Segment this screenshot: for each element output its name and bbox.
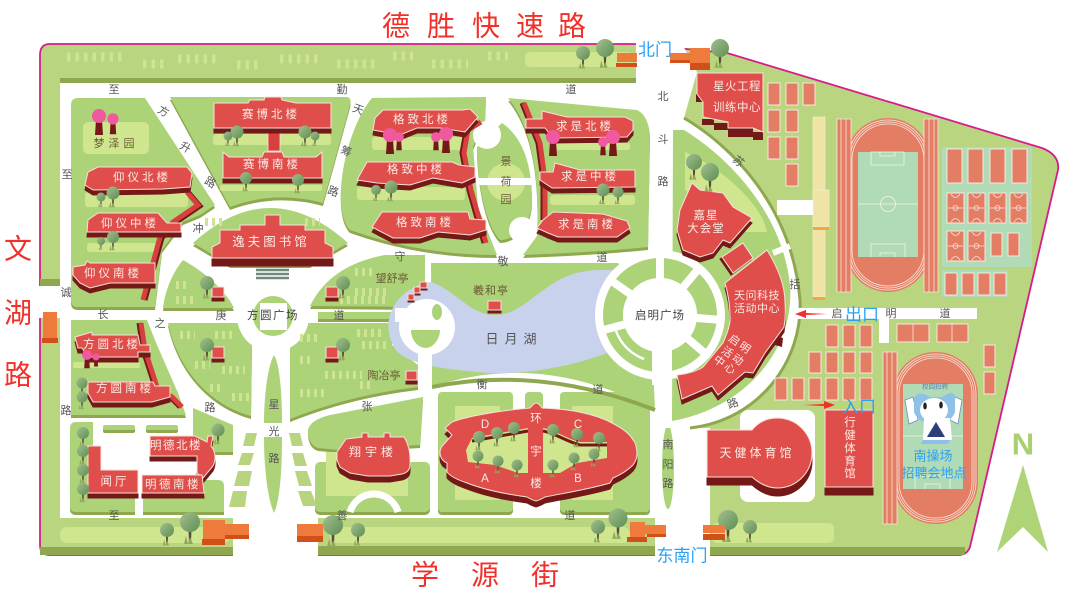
building: Tianjian gymnasium: 天健体育馆 — [719, 445, 795, 460]
road labels: 善 — [336, 508, 348, 522]
Nanyang road lens — [662, 425, 674, 509]
title: south road: 街 — [531, 560, 559, 590]
Fangyuan square: 方圆广场 — [247, 308, 299, 322]
building: Xinghuo training center: 星火工程 — [713, 80, 761, 93]
road labels: 道 — [566, 82, 576, 96]
road labels: 冲 — [192, 221, 204, 235]
building: Wenting hall: 闻厅 — [100, 474, 130, 488]
building: Xiangyu: 翔宇楼 — [349, 444, 397, 459]
title: south road — [411, 560, 559, 590]
Jinghe garden details: 园 — [500, 193, 512, 206]
title: north road: 快 — [472, 10, 500, 42]
title: west road: 文 — [4, 234, 32, 264]
building: Yangyi south — [73, 261, 155, 288]
corridors connecting buildings — [139, 103, 545, 407]
building: Xingjian gymnasium — [825, 410, 873, 487]
title: north road: 路 — [558, 10, 586, 42]
building: Xingjian gymnasium: 健 — [844, 429, 856, 442]
building: Yangyi middle — [87, 213, 181, 232]
building: Fangyuan north: 方圆北楼 — [83, 337, 141, 351]
road labels: 道 — [940, 306, 950, 320]
label: job fair location: 南操场 — [913, 448, 953, 464]
building: Huanyu A B C D ring: 环 — [530, 413, 542, 425]
road labels: 路 — [658, 175, 668, 188]
road labels: 升 — [177, 139, 193, 156]
building: Tianwen and Qiming activity center: 活动中心 — [734, 302, 780, 315]
decorative turf marks — [73, 122, 635, 512]
building: Jiaxing hall — [677, 183, 752, 257]
lake: Riyue Lake — [388, 270, 640, 373]
Qiming square — [595, 250, 725, 428]
south strips — [40, 523, 965, 555]
building: Mingde south: 明德南楼 — [145, 477, 201, 491]
road labels: 至 — [108, 84, 120, 96]
soccer field — [903, 384, 963, 489]
building: Qiushi middle — [540, 163, 635, 188]
road labels: 光 — [268, 424, 280, 438]
road labels: 道 — [592, 382, 604, 396]
Fangyuan square — [237, 280, 309, 352]
gym plot — [740, 410, 815, 502]
title: south road: 学 — [411, 560, 439, 590]
label: job fair location — [901, 448, 967, 480]
road labels: 筹 — [339, 143, 354, 160]
road labels: 路 — [202, 174, 218, 191]
building: Saibo north: 赛博北楼 — [242, 107, 300, 121]
soccer field — [858, 152, 918, 257]
south athletic track — [883, 352, 978, 524]
arrow: exit — [795, 310, 827, 318]
court zone — [942, 147, 1032, 297]
courtyard inner shadow — [472, 431, 607, 445]
road labels: 张 — [362, 400, 372, 413]
gate label: north gate: 北门 — [638, 40, 672, 60]
building: Gezhi south — [372, 212, 486, 238]
road labels: 至 — [108, 510, 120, 522]
road labels: 方 — [155, 102, 172, 120]
Qiming square: 启明广场 — [635, 308, 685, 322]
green campus blocks — [70, 97, 650, 512]
icon: mascot: 校园招聘 — [922, 382, 948, 390]
title: south road: 源 — [471, 560, 499, 590]
Jinghe garden details: 景 — [500, 155, 512, 168]
road labels: 庚 — [216, 308, 226, 322]
title: north road — [382, 10, 586, 42]
building: Huanyu A B C D ring — [440, 403, 637, 501]
building: Mingde north: 明德北楼 — [150, 438, 202, 452]
Jinghe garden details — [473, 121, 535, 243]
road labels: 路 — [326, 184, 341, 200]
road labels: 路 — [60, 404, 72, 417]
title: west road — [4, 234, 32, 390]
building: Tianjian gymnasium — [707, 418, 812, 488]
north strip shading — [40, 52, 636, 286]
building: Qiushi north — [526, 111, 633, 138]
building: Huanyu A B C D ring: 宇 — [530, 445, 542, 458]
side lanes — [837, 119, 938, 292]
courtyard east — [543, 428, 607, 473]
building: Yifu library — [212, 215, 333, 258]
road labels: 北 — [658, 90, 668, 103]
building: Xingjian gymnasium: 体 — [844, 441, 856, 455]
icon: mascot — [905, 382, 962, 444]
small pavilions: 望舒亭 — [376, 271, 408, 285]
building: Gezhi middle — [357, 162, 475, 185]
building: Qiushi south — [537, 212, 630, 237]
building: Xingjian gymnasium: 行 — [844, 416, 856, 429]
road labels: 衡 — [476, 378, 488, 391]
building: Huanyu A B C D ring: 楼 — [530, 476, 542, 490]
south small courts grid — [775, 324, 995, 400]
lake-side green with road edge — [431, 263, 655, 410]
courtyard west — [466, 428, 528, 473]
road labels: 诚 — [60, 286, 72, 299]
trees — [76, 39, 757, 547]
road labels: 天 — [351, 102, 365, 118]
garden: Mengze: 梦泽园 — [94, 137, 138, 150]
building: Tianwen and Qiming activity center: 启明 — [726, 332, 755, 357]
building: Jiaxing hall: 嘉星 — [694, 209, 718, 222]
building: Yifu library: 逸夫图书馆 — [232, 234, 310, 249]
inner zone around Qiming square — [672, 118, 800, 428]
Nanyang road lens: 路 — [662, 477, 674, 490]
building: Yangyi middle: 仰仪中楼 — [101, 216, 159, 230]
building: Tianwen and Qiming activity center — [677, 250, 785, 399]
north athletic track — [837, 118, 938, 292]
road labels: 苏 — [730, 153, 747, 170]
road labels: 路 — [204, 401, 216, 414]
small pavilions: 陶冶亭 — [368, 368, 400, 382]
arrow: entrance — [803, 401, 835, 409]
building: Fangyuan north — [75, 332, 150, 357]
road labels: 斗 — [658, 133, 668, 146]
building: Huanyu A B C D ring: B — [574, 473, 582, 485]
small pavilions: 羲和亭 — [473, 283, 509, 297]
building: Fangyuan south — [88, 381, 170, 402]
building: Saibo north — [214, 97, 331, 128]
building: Yangyi north — [85, 167, 192, 190]
title: north road: 速 — [516, 10, 544, 42]
building: Saibo south — [223, 152, 322, 178]
road labels: 勤 — [336, 83, 348, 96]
building: Qiushi north: 求是北楼 — [556, 119, 614, 133]
building: Tianwen and Qiming activity center: 活动 — [719, 344, 748, 369]
title: west road: 湖 — [4, 298, 32, 328]
building: Tianwen and Qiming activity center: 天问科技 — [734, 288, 780, 302]
road labels: 至 — [62, 169, 72, 181]
label: job fair location: 招聘会地点 — [901, 466, 967, 480]
compass: north arrow: N — [1012, 426, 1034, 462]
title: north road: 德 — [382, 10, 410, 42]
grandstand — [777, 117, 829, 300]
road labels: 星 — [268, 398, 280, 411]
building: Yangyi north: 仰仪北楼 — [113, 170, 171, 184]
building: Xinghuo training center: 训练中心 — [713, 100, 761, 114]
building: Gezhi south: 格致南楼 — [396, 215, 454, 229]
road labels: 道 — [596, 250, 608, 264]
building: Mingde north — [150, 436, 215, 478]
road network — [34, 36, 800, 560]
side lanes — [883, 352, 897, 524]
gate label: southeast gate: 东南门 — [656, 546, 708, 566]
building: annex block — [722, 243, 753, 273]
compass: north arrow — [997, 426, 1048, 552]
road labels: 启 — [832, 307, 842, 320]
Xingguang road lenses and paving — [229, 355, 317, 513]
road labels: 路 — [268, 452, 280, 465]
lake: Riyue Lake: 日月湖 — [485, 332, 543, 346]
building: Jiaxing hall: 大会堂 — [687, 221, 725, 235]
building: Yangyi south: 仰仪南楼 — [84, 266, 142, 280]
Jinghe garden details: 荷 — [500, 175, 512, 188]
Nanyang road lens: 阳 — [662, 458, 674, 471]
road labels: 明 — [886, 307, 896, 320]
building: Gezhi middle: 格致中楼 — [387, 162, 445, 176]
road labels: 之 — [154, 316, 166, 330]
building: Tianwen and Qiming activity center: 中心 — [711, 353, 740, 378]
library steps — [256, 270, 289, 278]
road labels: 道 — [334, 308, 344, 322]
title: west road: 路 — [4, 360, 32, 390]
label: exit: 出口 — [845, 306, 879, 324]
road labels: 括 — [790, 277, 800, 291]
east sports fields: small courts — [768, 83, 815, 186]
building: Qiushi middle: 求是中楼 — [561, 169, 619, 183]
lake island roads — [395, 299, 455, 397]
small pavilions — [212, 271, 509, 382]
building: Huanyu A B C D ring: D — [481, 419, 489, 431]
building: Qiushi south: 求是南楼 — [558, 217, 616, 231]
building: Saibo south: 赛博南楼 — [243, 157, 301, 171]
road labels: 敬 — [498, 255, 508, 268]
building: Xinghuo training center — [696, 73, 763, 140]
road labels: 道 — [564, 508, 576, 522]
road labels: 守 — [394, 249, 406, 263]
building: Mingde south — [142, 475, 204, 493]
road labels — [60, 82, 950, 522]
building: Xingjian gymnasium: 育 — [844, 454, 856, 468]
building: Fangyuan south: 方圆南楼 — [96, 381, 154, 395]
building: Huanyu A B C D ring: C — [574, 419, 582, 431]
Qiming road east spur — [797, 308, 977, 343]
label: entrance: 入口 — [842, 398, 876, 416]
building: Xiangyu — [337, 433, 410, 476]
gates — [42, 48, 725, 545]
building: Huanyu A B C D ring: A — [481, 473, 489, 485]
garden: Mengze — [92, 109, 138, 150]
Nanyang road lens: 南 — [662, 438, 674, 451]
road labels: 路 — [725, 396, 740, 412]
building: Wenting hall — [88, 446, 138, 493]
building: Xingjian gymnasium: 馆 — [844, 466, 856, 480]
building: Gezhi north: 格致北楼 — [393, 112, 451, 126]
building: Gezhi north — [373, 109, 478, 135]
road labels: 长 — [98, 308, 108, 321]
title: north road: 胜 — [427, 10, 455, 42]
